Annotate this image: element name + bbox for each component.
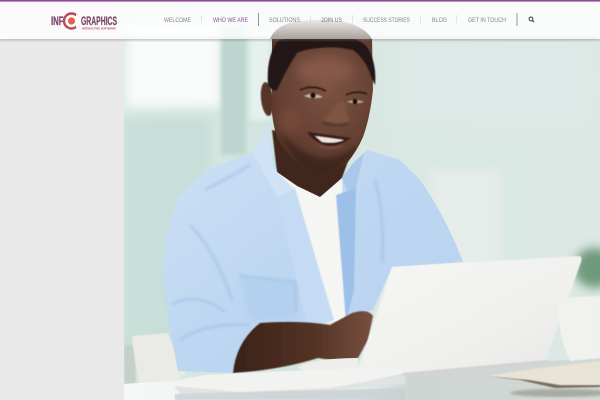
white t-shirt and shirt collar bbox=[256, 145, 364, 323]
computer mouse bbox=[298, 358, 358, 370]
menu item: who we are (active): WHO WE ARE bbox=[213, 17, 248, 24]
blurred office background bbox=[124, 24, 600, 384]
logo tagline: INTERACTIVE SOFTWARE bbox=[82, 26, 116, 30]
notebook on table bbox=[487, 361, 600, 388]
nose bbox=[322, 102, 350, 125]
laptop bbox=[358, 256, 582, 376]
stack of papers bbox=[168, 367, 406, 400]
top purple line bbox=[0, 0, 600, 2]
chair bbox=[132, 333, 186, 385]
face bbox=[272, 38, 373, 166]
coffee cup bbox=[558, 296, 600, 361]
smile bbox=[307, 132, 351, 148]
stubble shading bbox=[284, 138, 356, 175]
menu item: solutions: SOLUTIONS bbox=[269, 17, 300, 24]
header bar bbox=[0, 0, 600, 39]
shirt fold shadows bbox=[172, 165, 383, 340]
forearm and hand bbox=[233, 311, 373, 373]
left grey panel bbox=[0, 0, 124, 400]
photo: man working at a laptop bbox=[122, 0, 600, 400]
menu item: join us: JOIN US bbox=[321, 17, 342, 24]
table bbox=[124, 358, 600, 400]
logo word GRAPHICS: GRAPHICS bbox=[81, 16, 117, 28]
logo circle emblem bbox=[64, 14, 81, 28]
ear bbox=[260, 81, 272, 117]
menu item: get in touch: GET IN TOUCH bbox=[468, 17, 506, 24]
menu item: success stories: SUCCESS STORIES bbox=[363, 17, 410, 24]
menu item: welcome: WELCOME bbox=[164, 17, 191, 24]
notebook reflection bbox=[510, 389, 600, 397]
navigation menu bbox=[164, 17, 506, 24]
icon: search bbox=[529, 17, 534, 22]
background plant bbox=[574, 248, 600, 288]
man's head visible through header bbox=[270, 20, 372, 39]
blue shirt body bbox=[162, 128, 463, 373]
menu item: blog: BLOG bbox=[432, 17, 447, 24]
logo bbox=[51, 14, 117, 30]
logo word INF: INF bbox=[51, 16, 64, 28]
neck bbox=[272, 130, 352, 198]
header bar shadow bbox=[0, 36, 600, 41]
eyes and brows bbox=[300, 87, 367, 104]
hair bbox=[268, 34, 375, 90]
